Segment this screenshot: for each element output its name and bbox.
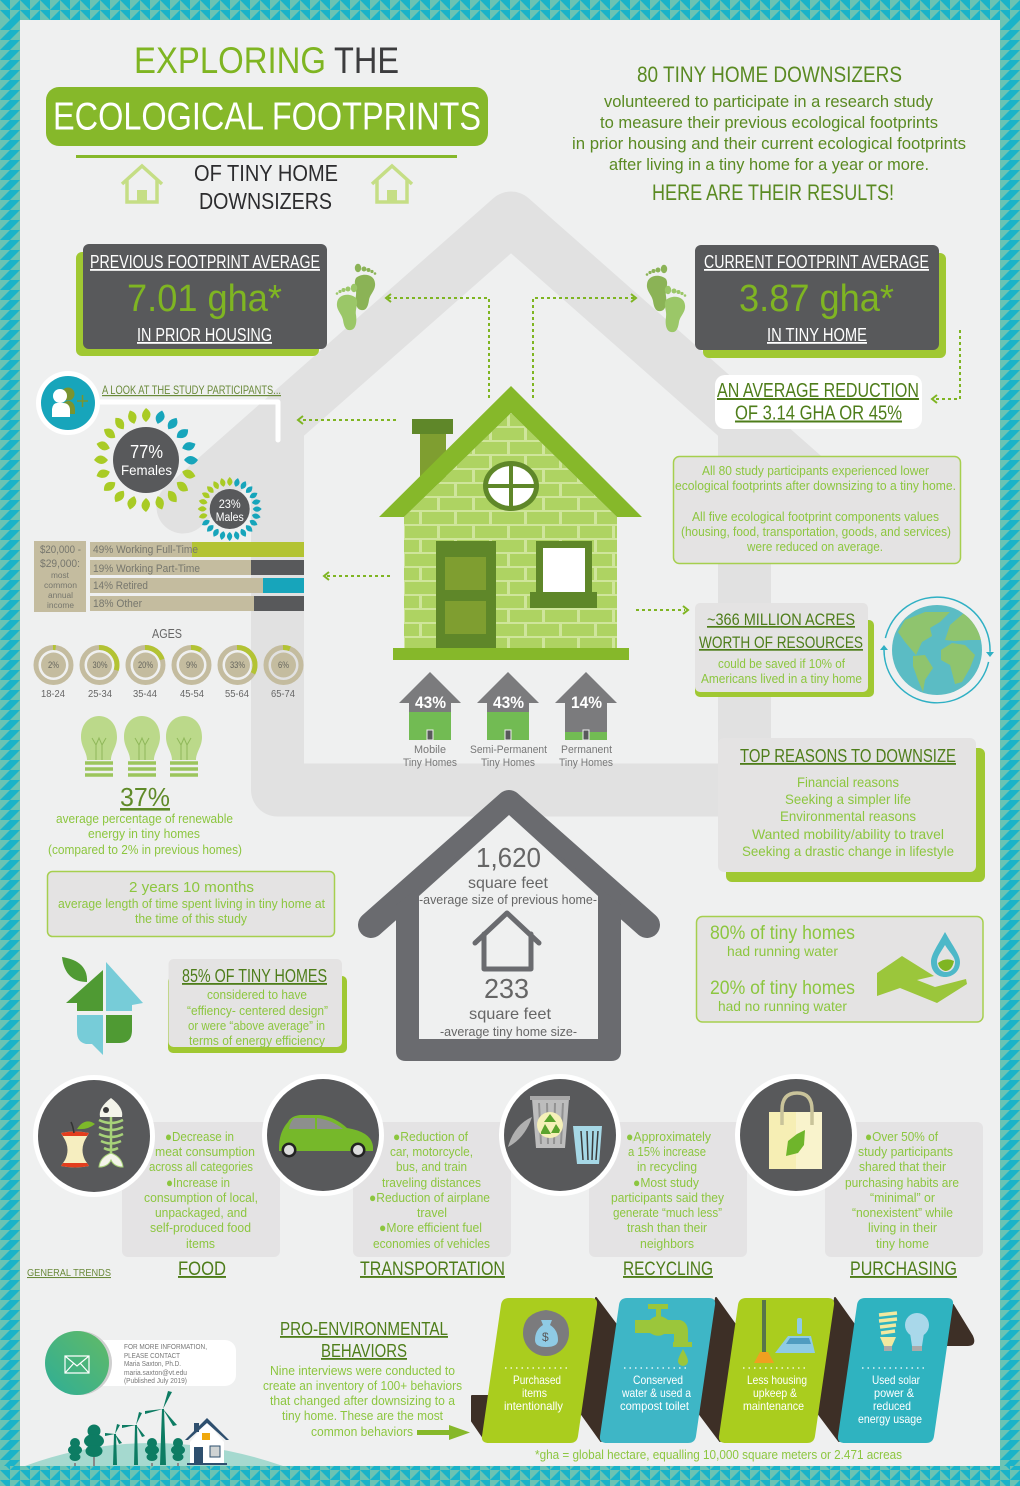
main green house illustration [379, 386, 642, 660]
text block: pro-environmental behaviors: create an inventory of 100+ behaviors [263, 1378, 462, 1393]
contact block: maria.saxton@vt.edu [124, 1370, 187, 1377]
icon: globe [880, 597, 994, 703]
panel: acres of resources: WORTH OF RESOURCES [699, 633, 863, 652]
panel: study findings: All five ecological footprint components values [692, 509, 939, 524]
icon: mop and dustpan [754, 1300, 815, 1363]
panel: purchased items intentionally [482, 1298, 597, 1443]
panel: time in tiny home: 2 years 10 months [129, 879, 254, 896]
chart: age gauges: 20% [138, 660, 153, 670]
chart: 23% males: 23% [219, 499, 241, 511]
panel: current footprint: IN TINY HOME [767, 325, 867, 345]
panel: previous footprint: PREVIOUS FOOTPRINT AVERAGE [90, 252, 320, 272]
panel: transportation: ●More efficient fuel [379, 1220, 482, 1235]
panel: previous footprint: IN PRIOR HOUSING [137, 325, 272, 345]
arrow: to acres [636, 606, 688, 614]
panel: purchasing: tiny home [876, 1236, 929, 1251]
chart: age gauges: 9% [186, 660, 197, 670]
text block: pro-environmental behaviors: BEHAVIORS [321, 1341, 407, 1361]
panel: recycling: participants said they [611, 1190, 724, 1205]
icon: food circle with apple core and fish bones [33, 1075, 155, 1197]
chart: permanent tiny homes [555, 672, 617, 769]
chart: mobile tiny homes: Mobile [414, 744, 446, 756]
center dark house with home sizes: -average size of previous home- [419, 892, 597, 907]
panel: income: most [51, 571, 70, 580]
panel: current footprint [695, 245, 946, 358]
intro text: 80 TINY HOME DOWNSIZERS [637, 62, 902, 87]
arrow: to reduction [932, 330, 960, 403]
text block: pro-environmental behaviors: tiny home. These are the most [282, 1408, 443, 1423]
intro text: to measure their previous ecological footprints [600, 113, 938, 132]
chart: permanent tiny homes: Permanent [561, 744, 612, 756]
icon: footprints right [646, 265, 686, 332]
text block: renewable energy: energy in tiny homes [88, 826, 200, 841]
panel: recycling [589, 1122, 747, 1280]
brick wall [404, 413, 617, 648]
contact block [45, 1331, 236, 1395]
panel: transportation: ●Reduction of airplane [369, 1190, 490, 1205]
chart: semi-permanent tiny homes: Tiny Homes [481, 757, 535, 769]
panel: food: self-produced food [150, 1220, 251, 1235]
panel: recycling: ●Most study [633, 1175, 699, 1190]
panel: study findings [674, 456, 960, 564]
chart: age gauges: 18-24 [41, 689, 65, 700]
roof [379, 386, 642, 517]
ribbon folds [472, 1298, 973, 1441]
chart: mobile tiny homes [399, 672, 461, 769]
contact block: PLEASE CONTACT [124, 1353, 181, 1360]
panel: less housing upkeep: Less housing [747, 1373, 807, 1387]
panel: study findings: All 80 study participants experienced lower [702, 463, 930, 478]
chart: 77% females [94, 408, 198, 512]
chart: age gauges: 35-44 [133, 689, 157, 700]
panel: recycling: neighbors [640, 1236, 694, 1251]
panel: previous footprint [76, 244, 327, 356]
text block: pro-environmental behaviors: that changed after downsizing to a [270, 1393, 456, 1408]
chart: permanent tiny homes: Tiny Homes [559, 757, 613, 769]
panel: food: ●Decrease in [165, 1129, 234, 1144]
intro text: in prior housing and their current ecological footprints [572, 134, 966, 153]
panel: energy efficiency: 85% OF TINY HOMES [182, 966, 327, 986]
chart: mobile tiny homes: Tiny Homes [403, 757, 457, 769]
panel: recycling: a 15% increase [628, 1144, 706, 1159]
intro text [572, 62, 966, 205]
panel: acres of resources: ~366 MILLION ACRES [707, 610, 855, 629]
icon: title house right [372, 166, 412, 202]
panel: energy efficiency: terms of energy efficiency [189, 1033, 325, 1048]
chart: semi-permanent tiny homes [470, 672, 547, 769]
chimney [412, 419, 453, 484]
chart: age gauges: 55-64 [225, 689, 249, 700]
icon: money bag: $ [542, 1330, 549, 1344]
text block: renewable energy [48, 782, 242, 857]
panel: transportation: TRANSPORTATION [360, 1259, 505, 1280]
arrow: house to previous footprint [386, 294, 489, 398]
panel: food: items [186, 1236, 215, 1251]
panel: running water: 20% of tiny homes [710, 978, 855, 999]
round window [483, 461, 539, 511]
contact block: (Published July 2019) [124, 1378, 187, 1385]
participants heading with icon [36, 371, 281, 440]
panel: less housing upkeep [719, 1298, 834, 1443]
panel: recycling: trash than their [627, 1220, 708, 1235]
chart: semi-permanent tiny homes: 43% [493, 693, 524, 712]
panel: current footprint: CURRENT FOOTPRINT AVERAGE [704, 252, 929, 272]
chart: age gauges [36, 648, 301, 700]
callout: average reduction: OF 3.14 GHA OR 45% [735, 402, 902, 424]
icon: small house [475, 913, 539, 969]
heading: ages: AGES [152, 626, 182, 641]
panel: study findings: (housing, food, transportation, goods, and services) [681, 524, 951, 539]
text block: renewable energy: average percentage of renewable [56, 811, 233, 826]
chart: age gauges: 2% [48, 660, 59, 670]
center dark house with home sizes: square feet [468, 875, 549, 892]
panel: solar power: reduced [873, 1399, 911, 1413]
panel: study findings: were reduced on average. [746, 539, 883, 554]
arrow: to participants [298, 416, 396, 424]
title: DOWNSIZERS [199, 188, 332, 214]
panel: income: $20,000 - [40, 544, 81, 556]
icon: light bulbs [81, 716, 202, 775]
contact block: Maria Saxton, Ph.D. [124, 1361, 181, 1368]
title: OF TINY HOME [194, 160, 338, 186]
chart: employment bars: 19% Working Part-Time [93, 563, 200, 575]
panel: acres of resources: could be saved if 10% of [718, 656, 845, 671]
panel: recycling: RECYCLING [623, 1259, 713, 1280]
icon: footprints left [336, 264, 376, 330]
intro text: after living in a tiny home for a year or more. [609, 155, 929, 174]
panel: time in tiny home: the time of this study [135, 911, 247, 926]
intro text: volunteered to participate in a research study [604, 92, 933, 111]
panel: energy efficiency: “effiency- centered design” [187, 1003, 328, 1018]
panel: study findings: ecological footprints after downsizing to a tiny home. [675, 478, 956, 493]
chart: employment bars: 14% Retired [93, 580, 148, 592]
icon: efficient house [62, 957, 143, 1055]
chart: 77% females: Females [121, 462, 172, 478]
icon: recycling bins circle [499, 1074, 621, 1196]
panel: solar power: Used solar [872, 1373, 920, 1387]
panel: transportation: economies of vehicles [373, 1236, 490, 1251]
icon: car circle [262, 1074, 384, 1196]
chart: age gauges: 65-74 [271, 689, 295, 700]
panel: purchasing: purchasing habits are [845, 1175, 959, 1190]
panel: recycling: generate “much less” [613, 1205, 722, 1220]
text block: renewable energy: (compared to 2% in previous homes) [48, 842, 242, 857]
panel: food: FOOD [178, 1259, 226, 1280]
panel: recycling: ●Approximately [626, 1129, 711, 1144]
panel: purchased items intentionally: Purchased [513, 1373, 561, 1387]
chart: age gauges: 45-54 [180, 689, 204, 700]
panel: food [122, 1122, 280, 1280]
panel: purchased items intentionally: items [522, 1386, 547, 1400]
chart: 77% females: 77% [130, 442, 163, 462]
panel: conserved water: water & used a [621, 1386, 691, 1400]
chart: 23% males [198, 477, 262, 541]
panel: income: common [44, 581, 77, 590]
panel: transportation: bus, and train [396, 1159, 467, 1174]
icon: faucet [635, 1304, 692, 1366]
icon: energy bulbs [879, 1313, 929, 1351]
panel: top reasons to downsize [718, 738, 985, 882]
panel: purchased items intentionally: intentionally [504, 1399, 563, 1413]
panel: running water: had running water [727, 943, 838, 959]
chart: age gauges: 30% [92, 660, 108, 670]
title: EXPLORING [134, 40, 326, 81]
panel: food: meat consumption [155, 1144, 255, 1159]
large background house outline [183, 218, 839, 790]
center dark house with home sizes: 1,620 [476, 842, 541, 873]
panel: running water [696, 916, 983, 1022]
panel: transportation: car, motorcycle, [390, 1144, 473, 1159]
panel: top reasons to downsize: Seeking a drastic change in lifestyle [742, 843, 954, 859]
text block: pro-environmental behaviors: PRO-ENVIRONMENTAL [280, 1319, 448, 1339]
panel: purchasing: study participants [858, 1144, 953, 1159]
chart: age gauges: 33% [230, 660, 245, 670]
panel: less housing upkeep: maintenance [743, 1399, 804, 1413]
panel: time in tiny home [48, 872, 334, 936]
panel: purchasing: living in their [868, 1220, 938, 1235]
panel: acres of resources: Americans lived in a tiny home [701, 671, 862, 686]
panel: less housing upkeep: upkeep & [753, 1386, 797, 1400]
panel: recycling: in recycling [637, 1159, 697, 1174]
callout: average reduction [715, 375, 922, 429]
panel: energy efficiency: considered to have [207, 987, 307, 1002]
panel: energy efficiency [168, 959, 347, 1053]
panel: purchasing: “nonexistent” while [852, 1205, 953, 1220]
panel: transportation: traveling distances [382, 1175, 481, 1190]
illustration: wind turbines, trees and house on hill [25, 1391, 283, 1466]
center dark house with home sizes: 233 [484, 973, 529, 1004]
text block: pro-environmental behaviors [263, 1319, 462, 1439]
panel: top reasons to downsize: Financial reasons [797, 774, 899, 790]
panel: top reasons to downsize: TOP REASONS TO DOWNSIZE [740, 746, 956, 766]
panel: top reasons to downsize: Environmental reasons [780, 808, 916, 824]
title [46, 40, 488, 214]
chart: mobile tiny homes: 43% [415, 693, 446, 712]
panel: transportation: ●Reduction of [393, 1129, 468, 1144]
center dark house with home sizes [371, 803, 647, 1061]
contact block: FOR MORE INFORMATION, [124, 1344, 207, 1351]
icon: shopping bag circle [735, 1074, 857, 1196]
panel: top reasons to downsize: Wanted mobility/ability to travel [752, 826, 944, 842]
center dark house with home sizes: square feet [469, 1006, 552, 1023]
panel: current footprint: 3.87 gha* [739, 278, 894, 320]
icon: title house left [122, 166, 162, 202]
panel: purchasing [825, 1122, 983, 1280]
heading: general trends: GENERAL TRENDS [27, 1267, 111, 1279]
panel: top reasons to downsize: Seeking a simpler life [785, 791, 911, 807]
panel: conserved water: Conserved [633, 1373, 683, 1387]
callout: average reduction: AN AVERAGE REDUCTION [717, 380, 919, 402]
panel: transportation [353, 1122, 511, 1280]
panel: purchasing: PURCHASING [850, 1259, 957, 1280]
panel: income [34, 541, 86, 612]
center dark house with home sizes: -average tiny home size- [440, 1024, 577, 1039]
panel: income: annual [48, 591, 73, 600]
panel: food: consumption of local, [144, 1190, 258, 1205]
panel: energy efficiency: or were “above average” in [188, 1018, 325, 1033]
base [393, 648, 629, 660]
title: THE [334, 40, 399, 81]
panel: running water: 80% of tiny homes [710, 923, 855, 944]
panel: solar power [838, 1298, 953, 1443]
chart: 23% males: Males [216, 512, 244, 524]
chart: employment bars [90, 542, 304, 611]
footnote: *gha = global hectare, equalling 10,000 square meters or 2.471 acreas [535, 1447, 902, 1462]
arrow: to income [324, 572, 390, 580]
square window [530, 541, 597, 608]
panel: solar power: power & [874, 1386, 914, 1400]
panel: food: ●Increase in [166, 1175, 230, 1190]
arrow: to ribbon [417, 1425, 470, 1440]
panel: conserved water [600, 1298, 715, 1443]
panel: transportation: travel [417, 1205, 447, 1220]
text block: pro-environmental behaviors: Nine interviews were conducted to [270, 1363, 455, 1378]
panel: purchasing: ●Over 50% of [865, 1129, 938, 1144]
icon: hand holding water drop [877, 932, 967, 1003]
panel: time in tiny home: average length of time spent living in tiny home at [58, 896, 325, 911]
panel: previous footprint: 7.01 gha* [127, 278, 282, 320]
panel: purchasing: shared that their [859, 1159, 947, 1174]
text block: pro-environmental behaviors: common behaviors [311, 1424, 413, 1439]
panel: purchasing: “minimal” or [870, 1190, 936, 1205]
panel: running water: had no running water [718, 998, 847, 1014]
arrow: house to current footprint [533, 294, 636, 398]
chart: age gauges: 6% [278, 660, 289, 670]
chart: semi-permanent tiny homes: Semi-Permanent [470, 744, 547, 756]
panel: acres of resources [695, 603, 874, 697]
chart: permanent tiny homes: 14% [571, 693, 602, 712]
intro text: HERE ARE THEIR RESULTS! [652, 180, 894, 205]
panel: income: $29,000: [40, 558, 80, 570]
panel: food: across all categories [149, 1159, 253, 1174]
panel: solar power: energy usage [858, 1412, 922, 1426]
chart: employment bars: 18% Other [93, 598, 142, 610]
title: ECOLOGICAL FOOTPRINTS [53, 96, 481, 138]
icon: money bag [523, 1310, 569, 1356]
panel: income: income [47, 601, 75, 610]
text block: renewable energy: 37% [120, 782, 170, 812]
panel: conserved water: compost toilet [620, 1399, 690, 1413]
door [436, 541, 496, 648]
participants heading with icon: A LOOK AT THE STUDY PARTICIPANTS... [102, 383, 281, 397]
chart: employment bars: 49% Working Full-Time [93, 544, 198, 556]
chart: age gauges: 25-34 [88, 689, 112, 700]
panel: food: unpackaged, and [155, 1205, 247, 1220]
